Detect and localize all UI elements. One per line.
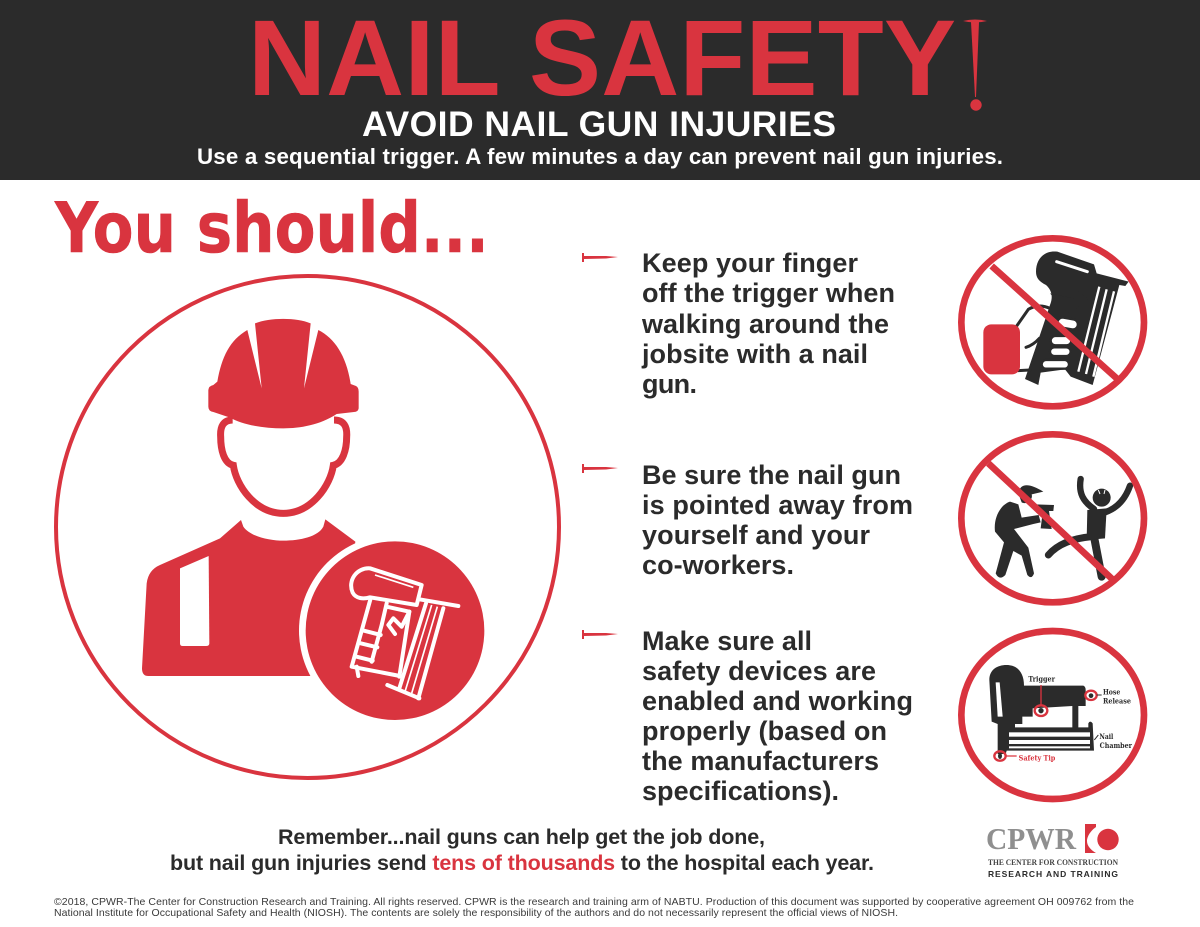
label: chamber: Chamber (1100, 741, 1133, 750)
footer credits (54, 896, 1134, 919)
logo: CPWR: RESEARCH AND TRAINING (988, 869, 1118, 879)
text block: safety devices: the manufacturers (642, 746, 879, 776)
label: trigger: Trigger (1028, 675, 1056, 684)
icon: hard hat (208, 319, 359, 428)
text block: safety devices: safety devices are (642, 656, 876, 686)
tagline: Use a sequential trigger. A few minutes a day can prevent nail gun injuries. (197, 144, 1003, 169)
text block: keep finger off trigger (641, 248, 895, 399)
callout: remember: but nail gun injuries send tens of thousands to the hospital each year. (170, 851, 874, 875)
text block: safety devices: enabled and working (642, 686, 913, 716)
icon: worker torso (142, 519, 355, 676)
text block: point gun away: Be sure the nail gun (642, 460, 901, 490)
icon: nail gun safety diagram (961, 631, 1144, 799)
icon: shoulder patch (180, 556, 209, 646)
icon: nail bullet 2 (582, 464, 618, 473)
text block: safety devices: Make sure all (642, 626, 812, 656)
text block: keep finger off trigger: walking around the (641, 309, 889, 339)
logo: CPWR (986, 821, 1119, 879)
callout: remember: Remember...nail guns can help get the job done, (278, 825, 765, 849)
footer credits: National Institute for Occupational Safety and Health (NIOSH). The contents are solely the responsibility of the authors and do not necessarily represent the official views of NIOSH. (54, 907, 898, 919)
title: NAIL SAFETY (248, 0, 956, 118)
text block: keep finger off trigger: off the trigger when (642, 278, 895, 308)
icon: nail bullet 3 (582, 630, 618, 639)
text block: keep finger off trigger: jobsite with a nail (641, 339, 868, 369)
logo: CPWR: THE CENTER FOR CONSTRUCTION (988, 857, 1119, 867)
text block: safety devices: properly (based on (642, 716, 887, 746)
icon: head outline (221, 420, 347, 513)
text block: keep finger off trigger: Keep your finger (642, 248, 858, 278)
icon: nail gun badge (299, 535, 491, 727)
callout: remember (170, 825, 874, 875)
label: safety tip: Safety Tip (1019, 753, 1056, 762)
label: release: Release (1103, 696, 1131, 705)
text block: point gun away: is pointed away from (642, 490, 913, 520)
text block: safety devices: specifications). (642, 776, 839, 806)
illustration: worker in circle (56, 276, 559, 778)
heading: you should: You should... (54, 189, 489, 269)
icon: do not point at co-workers (961, 434, 1144, 602)
icon: no finger on trigger (961, 238, 1144, 406)
label: hose release: Hose (1103, 688, 1120, 697)
footer credits: ©2018, CPWR-The Center for Construction Research and Training. All rights reserved. CPWR is the research and training arm of NABTU. Production of this document was supported by cooperative agreement OH 009762 from the (54, 896, 1134, 908)
label: nail: Nail (1099, 732, 1113, 741)
icon: nail bullet 1 (582, 253, 618, 262)
text block: point gun away (642, 460, 913, 580)
panel: header banner (0, 0, 1200, 180)
text block: safety devices (642, 626, 913, 806)
text block: point gun away: co-workers. (642, 550, 794, 580)
text block: keep finger off trigger: gun. (642, 369, 697, 399)
logo: CPWR: CPWR (986, 821, 1077, 856)
icon: nail exclamation mark (963, 20, 987, 111)
subtitle: AVOID NAIL GUN INJURIES (362, 104, 836, 144)
text block: point gun away: yourself and your (642, 520, 870, 550)
